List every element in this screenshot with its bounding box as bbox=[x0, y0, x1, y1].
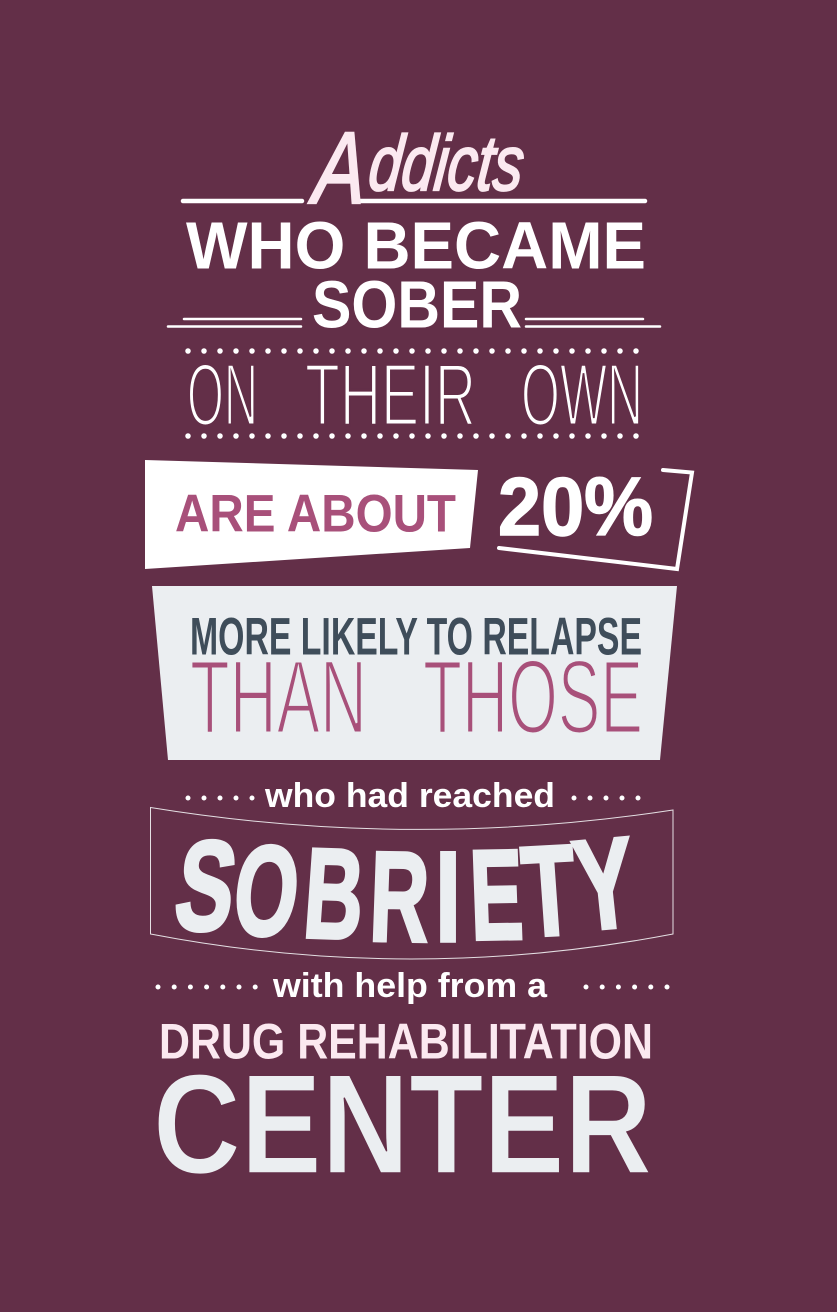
banner: sobriety: S bbox=[167, 814, 245, 959]
banner: are about bbox=[145, 460, 478, 569]
banner: sobriety: I bbox=[435, 825, 461, 969]
banner: sobriety: T bbox=[518, 819, 580, 964]
banner: sobriety: Y bbox=[567, 811, 642, 958]
stat: 20 percent in frame: 20% bbox=[498, 460, 653, 553]
text: with help from a: with help from a bbox=[272, 967, 548, 1005]
heading: on their own bbox=[187, 345, 643, 444]
heading: Addicts: ddicts bbox=[365, 119, 528, 207]
panel: more likely to relapse than those: THOSE bbox=[423, 639, 643, 756]
banner: sobriety: B bbox=[300, 822, 369, 966]
heading: on their own: OWN bbox=[521, 345, 643, 444]
banner: sobriety: R bbox=[367, 825, 432, 969]
text: who had reached: who had reached bbox=[264, 777, 555, 815]
heading: who became: WHO BECAME bbox=[186, 208, 646, 284]
heading: Addicts bbox=[183, 111, 645, 225]
banner: sobriety: O bbox=[227, 818, 306, 963]
panel: more likely to relapse than those bbox=[152, 586, 677, 760]
banner: sobriety bbox=[150, 808, 673, 969]
heading: center: CENTER bbox=[153, 1045, 652, 1204]
banner: are about: ARE ABOUT bbox=[175, 484, 456, 544]
heading: drug rehabilitation: DRUG REHABILITATION bbox=[159, 1014, 653, 1070]
panel: more likely to relapse than those: THAN bbox=[190, 639, 367, 756]
heading: on their own: THEIR bbox=[305, 345, 476, 444]
banner: sobriety: E bbox=[468, 823, 525, 967]
heading: sober bbox=[168, 268, 660, 342]
heading: on their own: ON bbox=[187, 345, 258, 444]
heading: sober: SOBER bbox=[312, 268, 522, 342]
heading: Addicts: A bbox=[306, 111, 370, 225]
